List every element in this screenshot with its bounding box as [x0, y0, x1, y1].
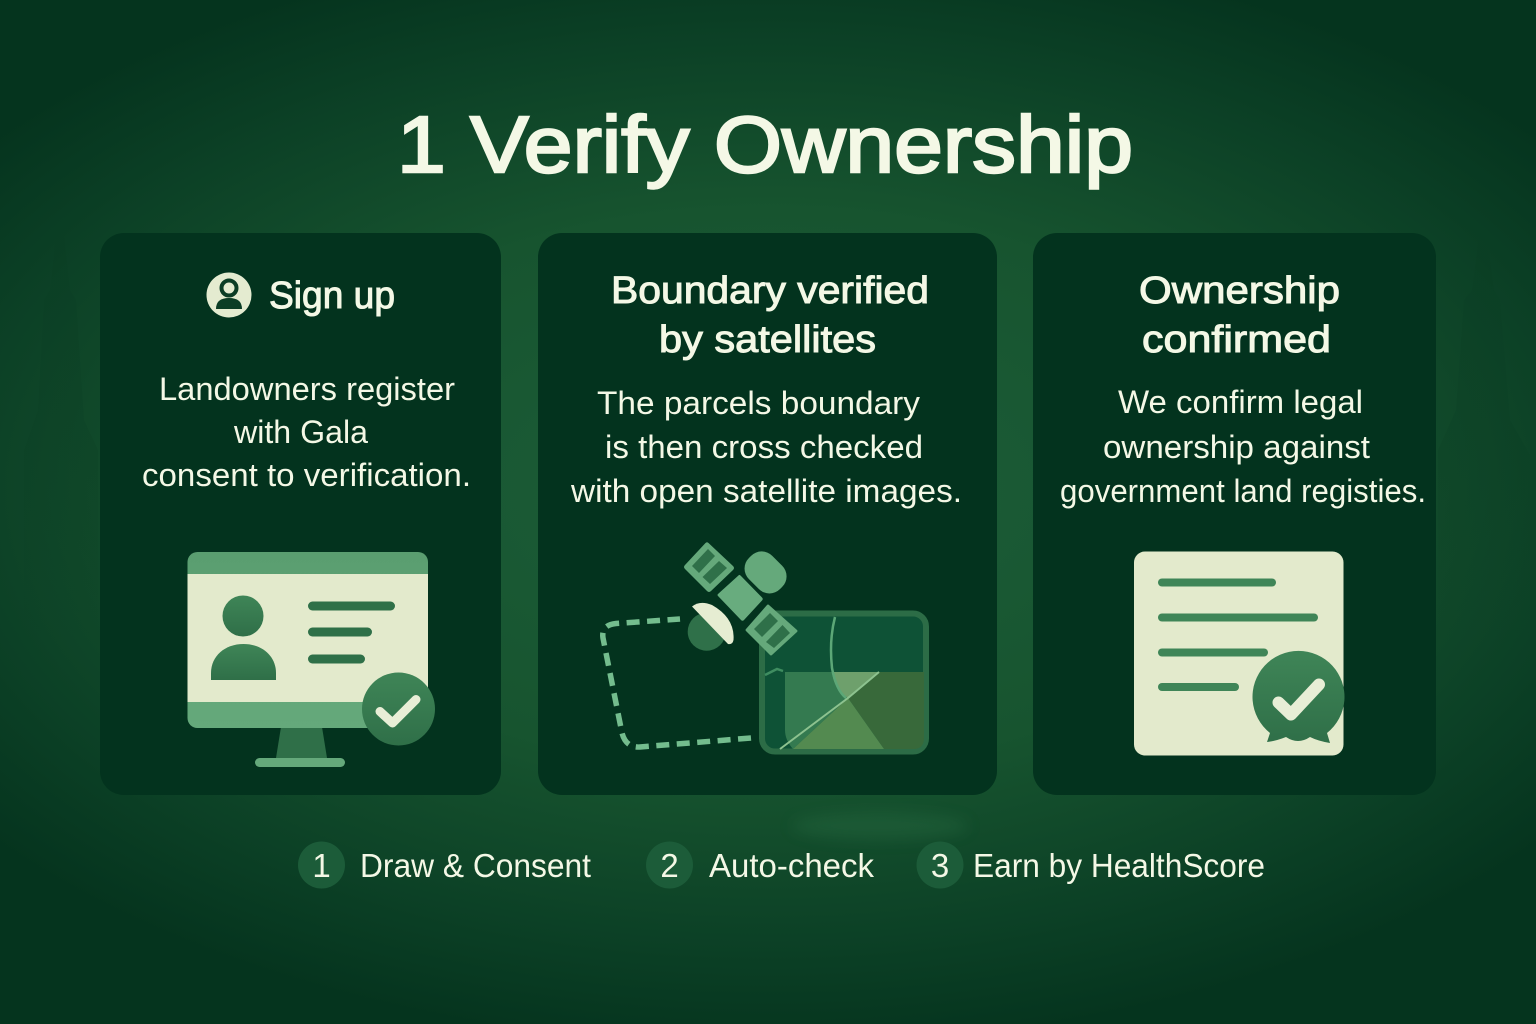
icon: computer monitor with profile: [188, 552, 435, 767]
heading: boundary verified: Boundary verified: [611, 270, 929, 312]
step 3: earn by healthscore: 3: [931, 847, 949, 884]
text block: ownership description: ownership against: [1103, 429, 1370, 465]
faint ground glow: [792, 812, 968, 840]
heading: boundary verified: by satellites: [659, 319, 876, 361]
text block: boundary description: The parcels boundary: [597, 385, 920, 421]
tree silhouette right: [1438, 205, 1530, 640]
icon: user badge: [206, 272, 252, 318]
step 2: auto-check: [646, 842, 874, 888]
text block: boundary description: [570, 385, 962, 509]
icon: satellite map tile: [762, 614, 926, 752]
heading: ownership confirmed: Ownership: [1139, 270, 1340, 312]
text block: sign up description: Landowners register: [159, 371, 455, 407]
heading: boundary verified: [611, 270, 929, 361]
heading: sign up: Sign up: [269, 275, 395, 317]
icon: satellite: [684, 542, 798, 656]
step 1: draw and consent: 1: [312, 847, 331, 884]
step 2: auto-check: Auto-check: [709, 847, 874, 884]
text block: sign up description: consent to verification.: [142, 457, 471, 493]
text block: ownership description: We confirm legal: [1118, 384, 1363, 420]
title: 1 Verify Ownership: [397, 100, 1133, 189]
panel: ownership confirmed: [1033, 233, 1436, 795]
heading: ownership confirmed: [1139, 270, 1340, 361]
text block: sign up description: [142, 371, 471, 493]
step 1: draw and consent: [298, 842, 591, 888]
text block: sign up description: with Gala: [233, 414, 368, 450]
panel: boundary verified by satellites: [538, 233, 997, 795]
icon: verified document: [1134, 552, 1344, 756]
text block: boundary description: is then cross checked: [605, 429, 923, 465]
text block: ownership description: government land registies.: [1060, 473, 1426, 509]
step 2: auto-check: 2: [660, 847, 679, 884]
panel: sign up: [100, 233, 501, 795]
text block: ownership description: [1060, 384, 1426, 509]
tree silhouette left: [24, 198, 98, 640]
heading: ownership confirmed: confirmed: [1142, 319, 1331, 361]
step 3: earn by healthscore: [916, 842, 1265, 888]
step 3: earn by healthscore: Earn by HealthScore: [973, 847, 1265, 884]
icon: dashed parcel boundary: [603, 619, 751, 747]
text block: boundary description: with open satellite images.: [570, 473, 962, 509]
step 1: draw and consent: Draw & Consent: [360, 847, 591, 884]
